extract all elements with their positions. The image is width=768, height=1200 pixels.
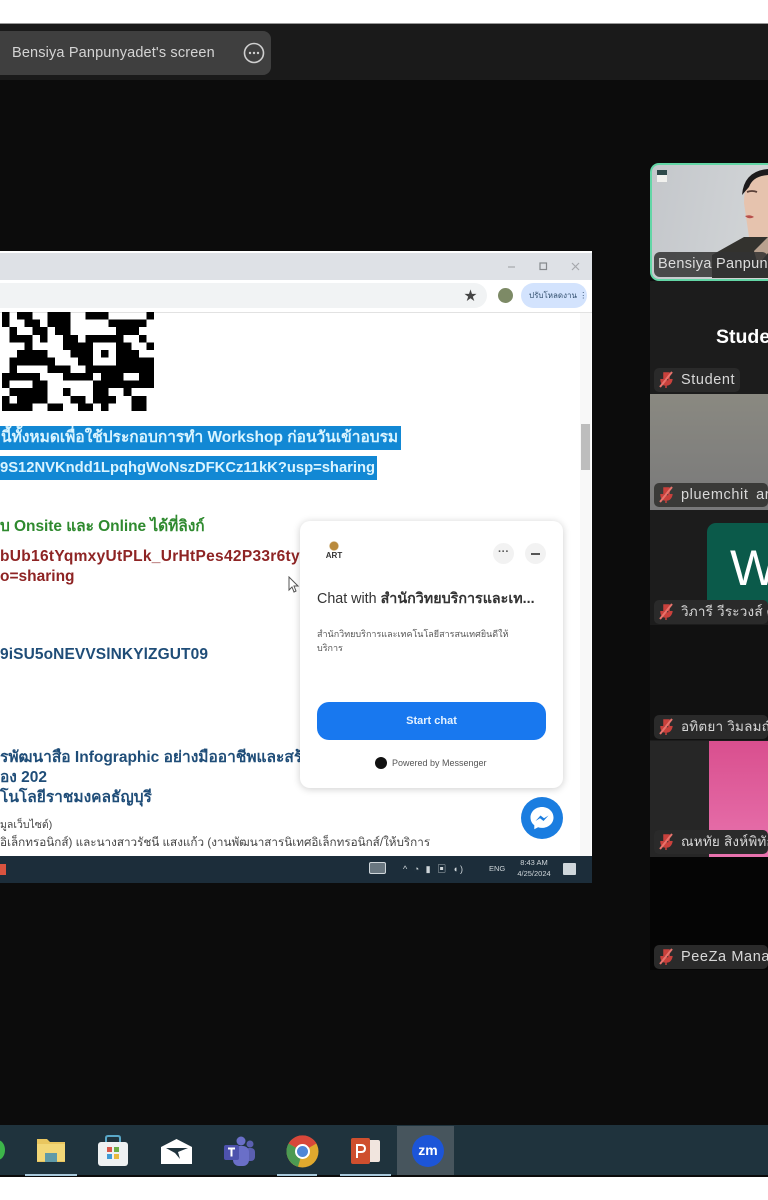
green registration line: บ Onsite และ Online ได้ที่ลิงก์: [0, 518, 205, 535]
browser toolbar: [0, 280, 592, 313]
red link line 1: bUb16tYqmxyUtPLk_UrHtPes42P33r6ty: [0, 548, 300, 565]
icon: mouse cursor: [288, 576, 300, 593]
system clock: 4/25/2024: [517, 869, 551, 878]
chat heading: Chat with สำนักวิทยบริการและเท...: [317, 591, 535, 607]
bottom white strip: [0, 1177, 768, 1200]
tile: Bensiya video: [650, 163, 768, 281]
tile: pluemchit video: [650, 394, 768, 510]
icon: red app: [0, 864, 6, 875]
icon: bookmark star: ★: [464, 288, 477, 303]
messenger chat card: [300, 521, 563, 788]
icon: more menu: [493, 543, 514, 564]
label: Nattaya: [654, 830, 768, 854]
icon: muted mic: [659, 603, 673, 620]
icon: green app: [0, 1140, 5, 1160]
icon: muted mic: [659, 371, 673, 388]
window controls: [508, 262, 580, 270]
tile: initial W: [707, 523, 768, 608]
course title lines: [0, 748, 300, 806]
browser title bar: [0, 253, 592, 280]
course title line 3: โนโลยีราชมงคลธัญบุรี: [0, 789, 152, 806]
small contact line 1: มูลเว็บไซต์): [0, 819, 52, 831]
start chat button: Start chat: [406, 715, 457, 727]
participants panel: [650, 281, 768, 970]
scrollbar: [580, 313, 591, 856]
icon: mail: [161, 1139, 192, 1164]
language label: ENG: [489, 864, 505, 873]
icon: zoom: zm: [418, 1142, 438, 1158]
icon: file explorer: [37, 1139, 65, 1162]
tile: black camera-off: [650, 625, 768, 740]
update button: [521, 283, 587, 308]
icon: messenger floating button: [521, 797, 563, 839]
label: Student: [654, 368, 740, 392]
pill text: Bensiya Panpunyadet's screen: [12, 45, 215, 61]
icon: notifications: [563, 863, 576, 875]
QR code: [2, 312, 154, 411]
blue link line: 9iSU5oNEVVSlNKYlZGUT09: [0, 646, 208, 663]
label: pluemchit: [654, 483, 768, 507]
system clock: 8:43 AM: [520, 858, 548, 867]
zoom taskbar highlight: [397, 1126, 454, 1175]
chat description: สำนักวิทยบริการและเทคโนโลยีสารสนเทศยินดีให้: [317, 629, 508, 639]
label: Wipharee: [654, 600, 768, 624]
sticker icon: [657, 170, 667, 182]
icon: teams: [224, 1136, 255, 1166]
icon: more options: [244, 42, 264, 64]
running indicator: chrome: [277, 1174, 317, 1176]
presenter screen pill: [0, 31, 271, 75]
top white strip: [0, 0, 768, 24]
windows taskbar: [0, 1125, 768, 1177]
icon: page logo: ART: [326, 551, 342, 560]
chat description: [317, 628, 508, 653]
tile: PeeZa camera-off: [650, 857, 768, 970]
zoom header bar: [0, 24, 768, 80]
shared windows taskbar: [0, 856, 592, 883]
system tray glyphs: ^ ◔ ▮ ▣ ◖): [403, 864, 465, 874]
icon: page logo: [322, 539, 346, 569]
powered by messenger: Powered by Messenger: [392, 758, 487, 768]
icon: minimize: [525, 543, 546, 564]
icon: chrome: [286, 1135, 318, 1168]
icon: powerpoint: [351, 1138, 380, 1164]
icon: profile avatar: [498, 288, 513, 303]
icon: muted mic: [659, 948, 673, 965]
label: PeeZa: [654, 945, 768, 969]
tray icons: [369, 862, 386, 874]
running indicator: explorer: [25, 1174, 77, 1176]
tile: pink video: [650, 741, 768, 857]
update button: ปรับโหลดงาน ⋮: [529, 291, 587, 300]
icon: store: [98, 1135, 128, 1166]
scrollbar thumb: [581, 424, 590, 470]
system clock: [517, 858, 551, 878]
label: Student: Student: [681, 372, 735, 388]
presenter portrait: [712, 169, 768, 278]
icon: muted mic: [659, 486, 673, 503]
pink video feed: [709, 741, 768, 857]
shared browser window: [0, 251, 592, 883]
icon: messenger small: [375, 757, 387, 769]
course title line 2: อง 202: [0, 769, 47, 786]
running indicator: powerpoint: [340, 1174, 391, 1176]
highlighted line 1: นี้ทั้งหมดเพื่อใช้ประกอบการทำ Workshop ก่อนวันเข้าอบรม: [1, 429, 398, 446]
highlighted line 2: [0, 456, 377, 480]
presenter name label: [654, 252, 768, 277]
label: Athittaya: [654, 715, 768, 739]
red link line 2: o=sharing: [0, 568, 75, 585]
icon: more menu: ···: [498, 546, 509, 558]
icon: muted mic: [659, 718, 673, 735]
small contact line 2: อิเล็กทรอนิกส์) และนางสาวรัชนี แสงแก้ว (งานพัฒนาสารนิเทศอิเล็กทรอนิกส์/ให้บริการ: [0, 836, 430, 849]
address bar: [0, 283, 487, 308]
chat description: บริการ: [317, 643, 343, 653]
start chat button: [317, 702, 546, 740]
icon: muted mic: [659, 833, 673, 850]
highlighted line 2: 9S12NVKndd1LpqhgWoNszDFKCz11kK?usp=sharing: [0, 460, 375, 476]
icon: zoom: [412, 1135, 444, 1167]
